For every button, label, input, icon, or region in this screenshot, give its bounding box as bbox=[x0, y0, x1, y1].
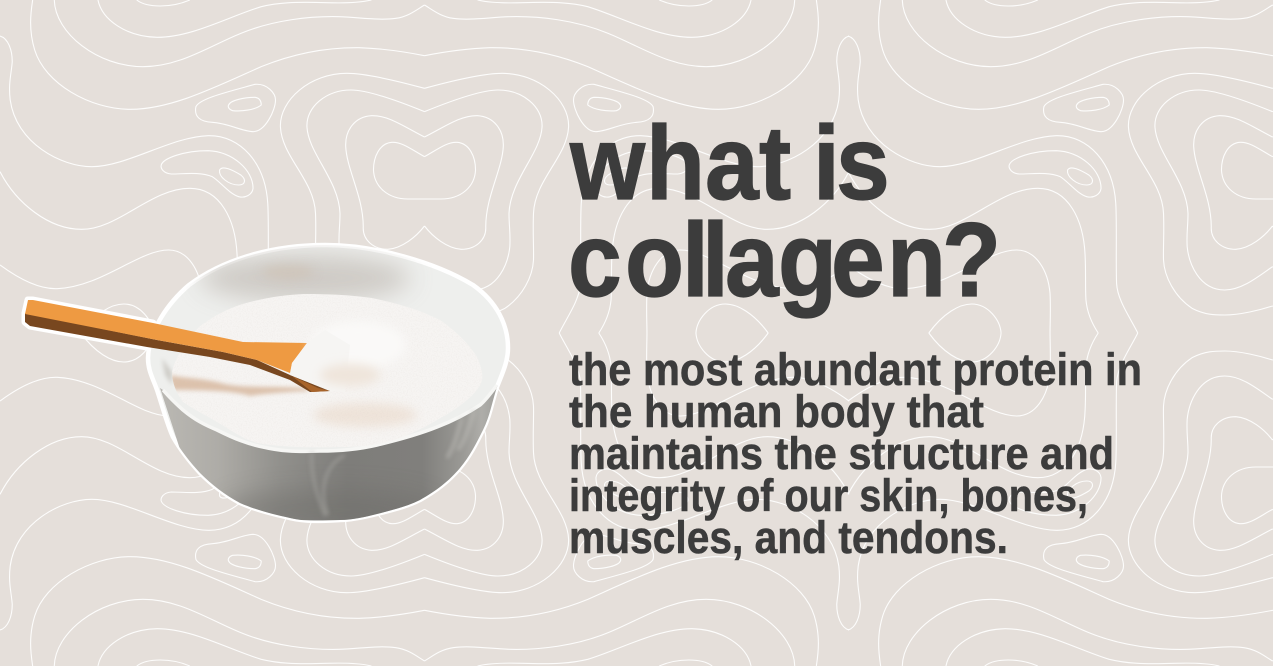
spoon tip sliver bbox=[292, 376, 330, 392]
description text block bbox=[569, 344, 1142, 563]
tan streak bbox=[170, 375, 308, 396]
left inner wall shadow bbox=[162, 358, 172, 385]
body moulded ridges bbox=[312, 452, 345, 516]
title: collagen? bbox=[568, 202, 1001, 319]
spoon white outline bbox=[25, 300, 165, 347]
description text block: maintains the structure and bbox=[569, 428, 1114, 479]
lower tan patches bbox=[313, 403, 417, 427]
bowl interior and body bbox=[160, 254, 510, 530]
photo: bowl of collagen powder with wooden spoon bbox=[25, 245, 510, 530]
body shadow toward base bbox=[228, 488, 424, 521]
bowl silhouette with white outline bbox=[148, 245, 508, 521]
rim lower highlight bbox=[163, 385, 497, 451]
spoon dark side bbox=[25, 313, 330, 392]
powder bbox=[172, 294, 415, 438]
spoon bbox=[25, 300, 330, 392]
title bbox=[568, 105, 1001, 319]
interior shadow bbox=[200, 254, 410, 302]
description text block: the human body that bbox=[569, 386, 984, 437]
bowl body bbox=[160, 385, 510, 520]
spoon top face bbox=[25, 300, 307, 373]
powder mound glow bbox=[310, 321, 406, 369]
title: what is bbox=[569, 105, 890, 222]
powder mound on spoon bbox=[290, 330, 350, 392]
grain bbox=[247, 300, 294, 326]
description text block: integrity of our skin, bones, bbox=[569, 470, 1088, 521]
description text block: muscles, and tendons. bbox=[569, 512, 1008, 563]
description text block: the most abundant protein in bbox=[569, 344, 1142, 395]
